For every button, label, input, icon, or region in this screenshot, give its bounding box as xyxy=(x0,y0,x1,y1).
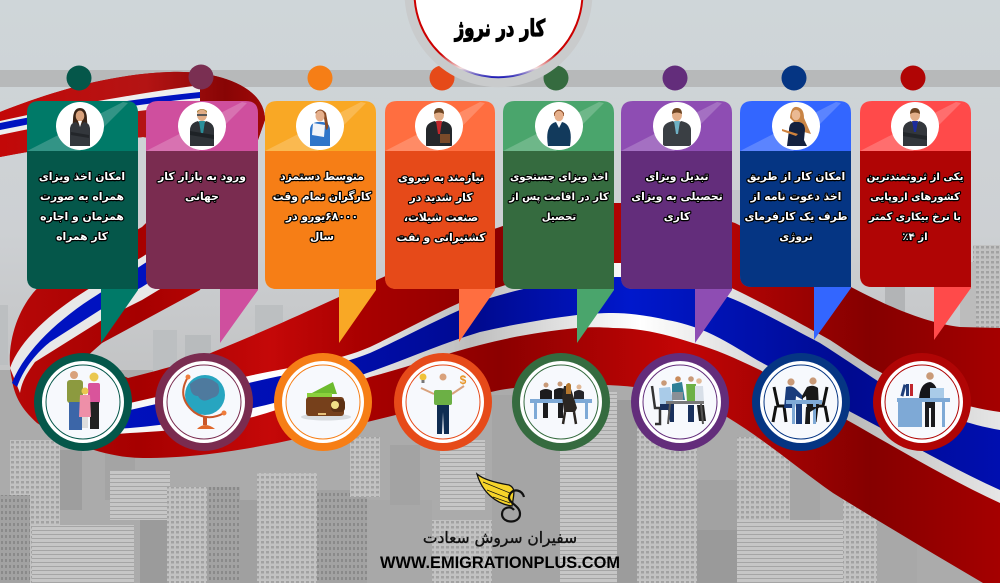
logo mark: winged swan xyxy=(477,474,524,522)
background city skyline xyxy=(0,190,1000,583)
card 2: global job market: جهانی xyxy=(185,190,219,203)
card 7: invitation letter: نروژی xyxy=(779,230,813,243)
card 8: wealthiest country: از ۴٪ xyxy=(902,232,928,243)
card 1: spouse visa: همراه به صورت xyxy=(40,190,124,203)
card 6: study-to-work visa: کاری xyxy=(664,210,691,223)
card 7: invitation letter: اخذ دعوت نامه از xyxy=(750,190,841,203)
title badge: کار در نروژ xyxy=(454,14,546,42)
card 6: study-to-work visa: تحصیلی به ویزای xyxy=(631,190,723,203)
card 6: study-to-work visa: تبدیل ویزای xyxy=(645,170,709,183)
avatar: man in grey suit xyxy=(653,102,701,150)
card 1: spouse visa: کار همراه xyxy=(56,230,109,243)
title badge xyxy=(404,0,592,87)
card 8: wealthiest country: با نرخ بیکاری کمتر xyxy=(868,212,961,223)
card 3: minimum wage: ۶۸۰۰۰یورو در xyxy=(285,210,358,223)
card 8: wealthiest country: کشورهای اروپایی xyxy=(870,192,960,203)
card 8: wealthiest country xyxy=(860,101,971,340)
horizontal timeline bar xyxy=(0,70,1000,87)
icon: handshake at table xyxy=(752,353,850,451)
card 5: job-seeker visa xyxy=(503,101,614,343)
card 7: invitation letter: امکان کار از طریق xyxy=(747,170,845,183)
card 1: spouse visa: امکان اخذ ویزای xyxy=(39,170,125,183)
card 4: labour shortage: کار شدید در xyxy=(409,191,473,204)
avatar: businesswoman xyxy=(535,102,583,150)
icon: skilled worker with idea and money: $ xyxy=(460,373,467,387)
card 1: spouse visa xyxy=(27,101,138,343)
card 8: wealthiest country: یکی از ثروتمندترین xyxy=(867,172,964,183)
card 7: invitation letter: طرف یک کارفرمای xyxy=(744,210,848,223)
icon: wallet xyxy=(274,353,372,451)
logo name: سفیران سروش سعادت xyxy=(423,529,577,548)
icon: globe xyxy=(155,353,253,451)
card 2: global job market xyxy=(146,101,258,343)
avatar: man with folder xyxy=(415,102,463,150)
icon: team around laptop xyxy=(631,353,729,451)
icon: skilled worker with idea and money xyxy=(394,353,492,451)
website address: WWW.EMIGRATIONPLUS.COM xyxy=(380,553,620,572)
card 4: labour shortage: صنعت شیلات، xyxy=(404,211,478,224)
card 3: minimum wage xyxy=(265,101,376,343)
card 6: study-to-work visa xyxy=(621,101,732,343)
avatar: woman with papers xyxy=(296,102,344,150)
card 1: spouse visa: همزمان و اجاره xyxy=(40,210,124,223)
card 5: job-seeker visa: تحصیل xyxy=(542,212,576,223)
card 3: minimum wage: کارگران تمام وقت xyxy=(273,190,372,203)
icon: employee at desk xyxy=(873,353,971,451)
card 2: global job market: ورود به بازار کار xyxy=(157,170,246,183)
card 3: minimum wage: متوسط دستمزد xyxy=(280,170,364,183)
timeline dots xyxy=(66,64,926,90)
card 7: invitation letter xyxy=(740,101,851,340)
card 4: labour shortage: نیازمند به نیروی xyxy=(398,171,484,184)
icon: family xyxy=(34,353,132,451)
card 5: job-seeker visa: اخذ ویزای جستجوی xyxy=(510,172,608,183)
card 3: minimum wage: سال xyxy=(310,230,334,243)
card 5: job-seeker visa: کار در اقامت پس از xyxy=(508,192,609,203)
avatar: man with crossed arms xyxy=(891,102,939,150)
avatar: woman with long hair xyxy=(772,102,820,150)
card 4: labour shortage xyxy=(385,101,495,342)
avatar: woman xyxy=(56,102,104,150)
card 4: labour shortage: کشتیرانی و نفت xyxy=(397,231,486,244)
icon: meeting table xyxy=(512,353,610,451)
avatar: man with glasses xyxy=(178,102,226,150)
